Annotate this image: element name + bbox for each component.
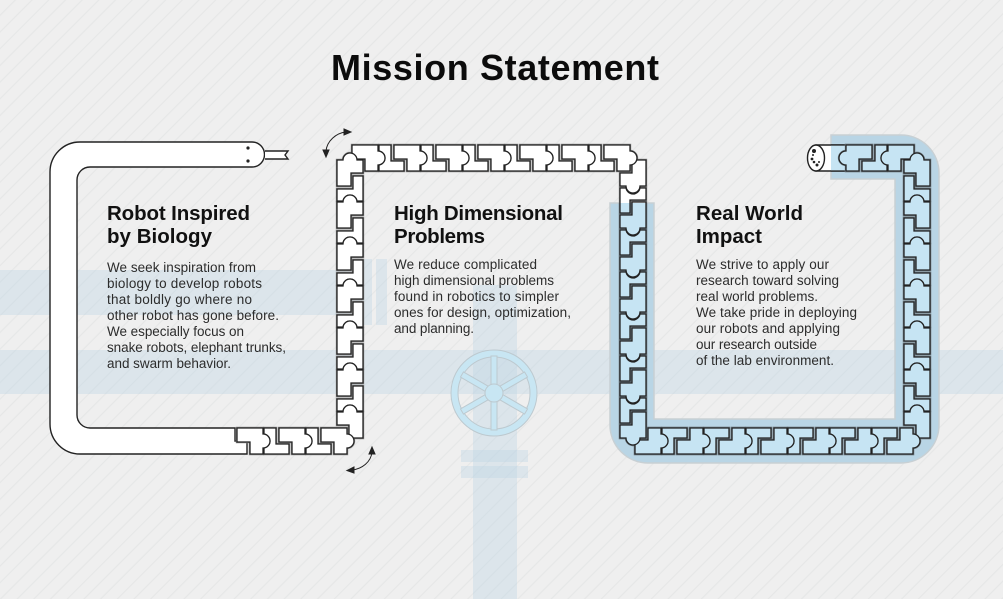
- heading: Robot Inspired by Biology: [107, 202, 250, 248]
- body: problems: [394, 257, 571, 336]
- body: biology: We especially focus on: [107, 324, 244, 339]
- body: biology: that boldly go where no: [107, 292, 252, 307]
- body: impact: real world problems.: [696, 289, 818, 304]
- heading: Robot Inspired by Biology: by Biology: [107, 225, 213, 248]
- heading: Real World Impact: Real World: [696, 202, 803, 225]
- body: impact: our robots and applying: [696, 321, 840, 336]
- arrow: top rotation: [323, 129, 351, 157]
- background pipes: [0, 259, 1003, 599]
- text block: Real World Impact: [696, 202, 857, 368]
- body: impact: our research outside: [696, 337, 817, 352]
- snake tail: [808, 145, 848, 171]
- heading: High Dimensional Problems: [394, 202, 563, 248]
- icon: valve wheel: [451, 350, 537, 436]
- text block: High Dimensional Problems: [394, 202, 571, 336]
- body: impact: We take pride in deploying: [696, 305, 857, 320]
- body: biology: [107, 260, 286, 371]
- snake segments: [237, 145, 930, 454]
- title: Mission Statement: [331, 47, 659, 88]
- body: impact: [696, 257, 857, 368]
- snake head: [246, 146, 288, 163]
- heading: High Dimensional Problems: Problems: [394, 225, 485, 248]
- body: problems: found in robotics to simpler: [394, 289, 560, 304]
- body: impact: research toward solving: [696, 273, 839, 288]
- text block: Robot Inspired by Biology: [107, 202, 286, 371]
- heading: High Dimensional Problems: High Dimensional: [394, 202, 563, 225]
- snake body tube: [50, 142, 264, 454]
- body: problems: ones for design, optimization,: [394, 305, 571, 320]
- heading: Robot Inspired by Biology: Robot Inspired: [107, 202, 250, 225]
- body: biology: biology to develop robots: [107, 276, 262, 291]
- body: problems: We reduce complicated: [394, 257, 537, 272]
- body: biology: We seek inspiration from: [107, 260, 256, 275]
- snake tail and segments tinted blue: [618, 144, 932, 456]
- body: biology: snake robots, elephant trunks,: [107, 340, 286, 355]
- body: problems: high dimensional problems: [394, 273, 554, 288]
- arrow: bottom rotation: [347, 447, 375, 473]
- body: impact: of the lab environment.: [696, 353, 834, 368]
- body: biology: and swarm behavior.: [107, 356, 231, 371]
- body: problems: and planning.: [394, 321, 474, 336]
- body: impact: We strive to apply our: [696, 257, 830, 272]
- heading: Real World Impact: [696, 202, 803, 248]
- blue highlight band: [610, 135, 939, 463]
- heading: Real World Impact: Impact: [696, 225, 762, 248]
- body: biology: other robot has gone before.: [107, 308, 279, 323]
